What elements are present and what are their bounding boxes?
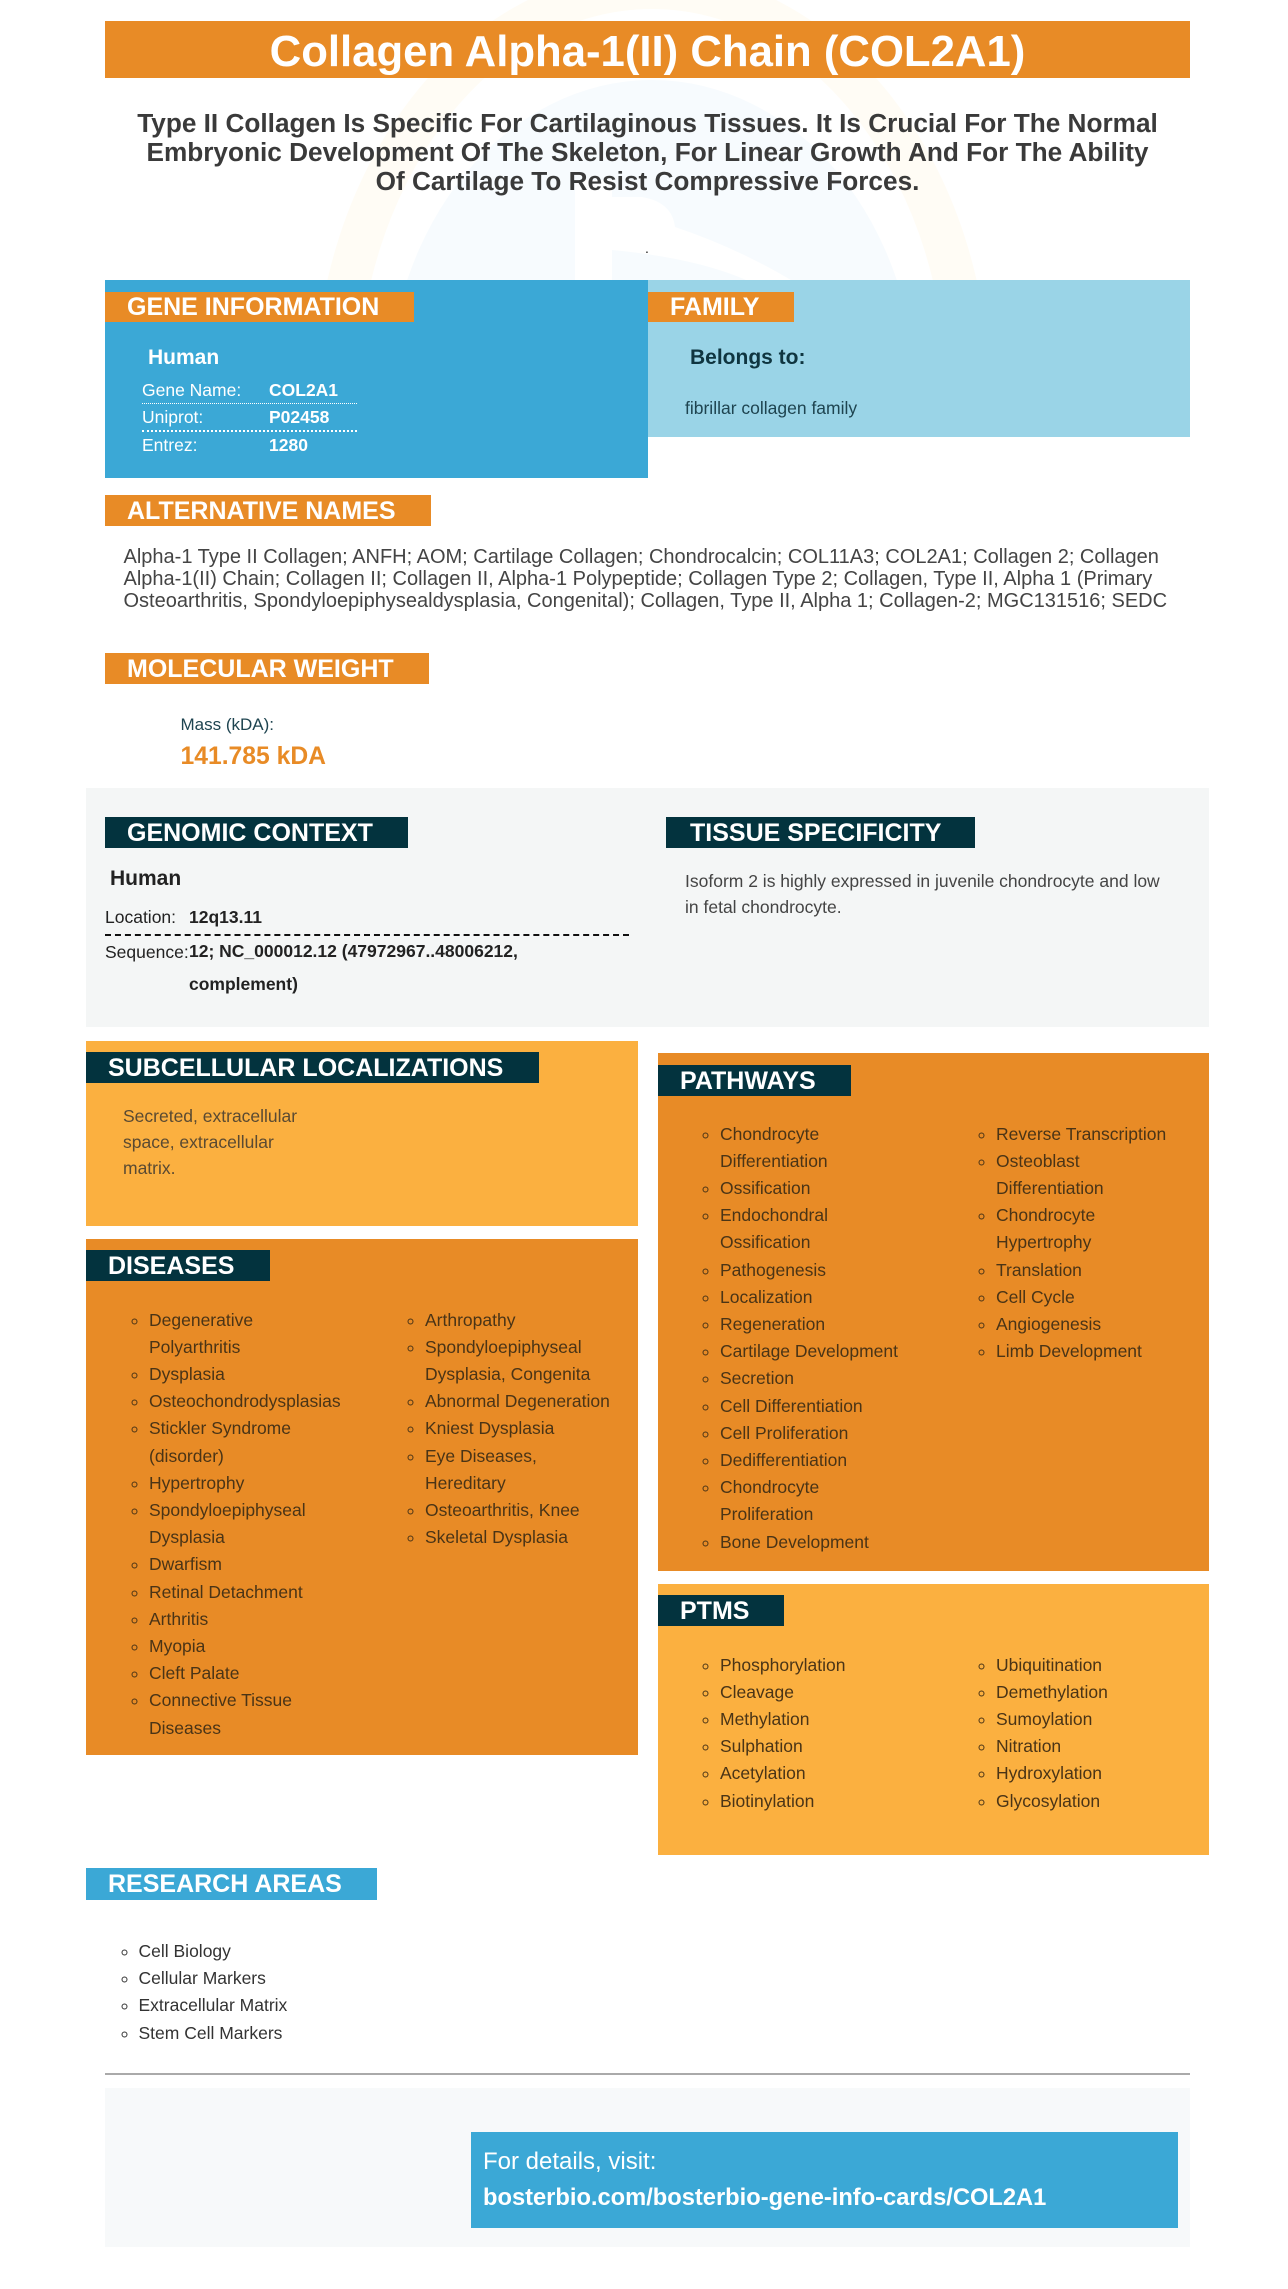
heading: diseases: DISEASES [108,1252,234,1280]
heading: tissue specificity: TISSUE SPECIFICITY [690,819,941,847]
gene name row [142,377,357,404]
research areas list [122,1941,287,2043]
panel: PTMs [658,1584,1209,1855]
summary text [137,108,1158,196]
panel: subcellular localizations [86,1041,638,1226]
localization text: space, extracellular [123,1132,274,1152]
disease list column 1: (disorder) [149,1446,224,1466]
title: Collagen Alpha-1(II) Chain (COL2A1) [270,27,1025,76]
panel: genomic context and tissue specificity: complement) [189,974,298,994]
disease list column 1: Osteochondrodysplasias [149,1391,341,1411]
pathway list column 1: Chondrocyte [720,1477,819,1497]
pathway list column 1: Proliferation [720,1504,813,1524]
summary text: Embryonic Development Of The Skeleton, For Linear Growth And For The Ability [146,136,1149,166]
PTM list column 2: Ubiquitination [996,1654,1102,1674]
pathway list column 2: Differentiation [996,1178,1104,1198]
pathway list column 1: Dedifferentiation [720,1450,847,1470]
alternative names text: Osteoarthritis, Spondyloepiphysealdysplasia, Congenital); Collagen, Type II, Alpha 1; Collagen-2; MGC131516; SEDC [124,590,1167,612]
disease list column 2: Spondyloepiphyseal [425,1337,582,1357]
pathway list column 2: Reverse Transcription [996,1124,1166,1144]
pathway list column 2: Chondrocyte [996,1205,1095,1225]
disease list column 2 [408,1310,610,1547]
PTM list column 1: Acetylation [720,1763,806,1783]
disease list column 1: Diseases [149,1718,221,1738]
pathway list column 1: Bone Development [720,1532,869,1552]
disease list column 1: Myopia [149,1636,205,1656]
location row: Location: [105,907,176,927]
pathway list column 1: Ossification [720,1232,810,1252]
disease list column 1 [132,1310,341,1738]
disease list column 2: Eye Diseases, [425,1446,537,1466]
PTM list column 1: Cleavage [720,1682,794,1702]
tissue specificity text [685,871,1160,917]
disease list column 2: Dysplasia, Congenita [425,1364,590,1384]
heading: PTMs: PTMS [680,1597,749,1625]
disease list column 2: Osteoarthritis, Knee [425,1500,580,1520]
panel: footer [105,2088,1190,2247]
alternative names text: Alpha-1 Type II Collagen; ANFH; AOM; Cartilage Collagen; Chondrocalcin; COL11A3; COL2A1; Collagen 2; Collagen [124,546,1159,568]
disease list column 1: Dwarfism [149,1554,222,1574]
heading: pathways: PATHWAYS [680,1067,816,1095]
disease list column 1: Arthritis [149,1609,208,1629]
dashed divider [105,934,629,936]
heading: molecular weight: MOLECULAR WEIGHT [127,655,394,683]
disease list column 2: Arthropathy [425,1310,515,1330]
pathway list column 1: Differentiation [720,1151,828,1171]
alternative names text: Alpha-1(II) Chain; Collagen II; Collagen II, Alpha-1 Polypeptide; Collagen Type 2; Collagen, Type II, Alpha 1 (Primary [124,568,1152,590]
tissue specificity text: in fetal chondrocyte. [685,897,842,917]
disease list column 1: Spondyloepiphyseal [149,1500,306,1520]
footer divider [105,2073,1190,2075]
disease list column 1: Connective Tissue [149,1690,292,1710]
disease list column 1: Hypertrophy [149,1473,244,1493]
heading: research areas: RESEARCH AREAS [108,1870,342,1898]
pathway list column 1: Endochondral [720,1205,828,1225]
panel: genomic context and tissue specificity: 12q13.11 [189,907,262,927]
entrez row: Entrez: [142,435,197,455]
heading: pathways [658,1065,851,1096]
PTM list column 2: Glycosylation [996,1791,1100,1811]
details label: For details, visit: [483,2148,656,2175]
heading: PTMs [658,1595,784,1626]
mass value: 141.785 kDA [180,743,326,770]
research areas list: Extracellular Matrix [138,1995,287,2015]
heading: family: FAMILY [670,293,759,321]
details URL: bosterbio.com/bosterbio-gene-info-cards/COL2A1 [483,2185,1046,2211]
PTM list column 1: Biotinylation [720,1791,814,1811]
small dot: . [645,240,649,256]
research areas list: Cellular Markers [138,1968,266,1988]
pathway list column 1: Regeneration [720,1314,825,1334]
species label: Human [148,346,219,369]
pathway list column 2: Translation [996,1260,1082,1280]
summary text: Type II Collagen Is Specific For Cartilaginous Tissues. It Is Crucial For The Normal [137,108,1158,138]
pathway list column 1: Cell Differentiation [720,1396,863,1416]
PTM list column 2: Sumoylation [996,1709,1092,1729]
gene name row: Gene Name: [142,380,241,400]
sequence row: Sequence: [105,942,189,962]
family text: fibrillar collagen family [685,398,857,418]
pathway list column 2: Limb Development [996,1341,1142,1361]
heading: diseases [86,1250,270,1281]
disease list column 2: Hereditary [425,1473,506,1493]
pathway list column 1: Pathogenesis [720,1260,826,1280]
uniprot row: Uniprot: [142,407,203,427]
uniprot row: P02458 [269,407,329,427]
heading: gene information: GENE INFORMATION [127,293,379,321]
alternative names text [124,546,1167,612]
panel: genomic context and tissue specificity: 12; NC_000012.12 (47972967..48006212, [189,941,518,961]
disease list column 1: Dysplasia [149,1364,225,1384]
background watermark logo [328,0,976,280]
panel: gene information: 1280 [269,435,308,455]
pathway list column 1: Ossification [720,1178,810,1198]
PTM list column 2: Demethylation [996,1682,1108,1702]
summary text: Of Cartilage To Resist Compressive Forces. [376,166,919,196]
disease list column 1: Polyarthritis [149,1337,240,1357]
disease list column 2: Abnormal Degeneration [425,1391,610,1411]
PTM list column 2: Nitration [996,1736,1061,1756]
pathway list column 2 [978,1124,1166,1361]
disease list column 1: Stickler Syndrome [149,1418,291,1438]
pathway list column 1 [702,1124,898,1552]
localization text: matrix. [123,1158,176,1178]
research areas list: Cell Biology [138,1941,231,1961]
location row [105,907,262,927]
pathway list column 2: Angiogenesis [996,1314,1101,1334]
panel: genomic context and tissue specificity [86,788,1209,1027]
heading: family [648,292,794,322]
panel: family [648,280,1190,437]
panel: pathways [658,1053,1209,1571]
heading: subcellular localizations: SUBCELLULAR LOCALIZATIONS [108,1054,503,1082]
PTM list column 1: Sulphation [720,1736,803,1756]
panel: gene information [105,280,648,478]
pathway list column 1: Cell Proliferation [720,1423,848,1443]
uniprot row [142,404,357,432]
pathway list column 1: Chondrocyte [720,1124,819,1144]
pathway list column 2: Hypertrophy [996,1232,1091,1252]
heading: alternative names: ALTERNATIVE NAMES [127,497,396,525]
callout: details link [471,2132,1178,2228]
pathway list column 1: Localization [720,1287,812,1307]
PTM list column 2: Hydroxylation [996,1763,1102,1783]
localization text [123,1106,297,1178]
pathway list column 1: Cartilage Development [720,1341,898,1361]
PTM list column 1: Phosphorylation [720,1654,846,1674]
gene name row: COL2A1 [269,380,338,400]
localization text: Secreted, extracellular [123,1106,297,1126]
disease list column 2: Kniest Dysplasia [425,1418,554,1438]
disease list column 1: Cleft Palate [149,1663,239,1683]
heading: genomic context: GENOMIC CONTEXT [127,819,373,847]
PTM list column 1 [702,1654,846,1811]
species label: Human [110,867,181,890]
panel: diseases [86,1239,638,1755]
research areas list: Stem Cell Markers [138,2023,282,2043]
title [105,21,1190,78]
disease list column 1: Retinal Detachment [149,1582,303,1602]
entrez row [142,435,308,455]
mass label: Mass (kDA): [180,715,274,734]
PTM list column 1: Methylation [720,1709,810,1729]
pathway list column 2: Cell Cycle [996,1287,1075,1307]
belongs to label: Belongs to: [690,346,806,369]
sequence row [105,941,518,994]
pathway list column 1: Secretion [720,1368,794,1388]
PTM list column 2 [978,1654,1108,1811]
disease list column 2: Skeletal Dysplasia [425,1527,568,1547]
pathway list column 2: Osteoblast [996,1151,1080,1171]
disease list column 1: Dysplasia [149,1527,225,1547]
tissue specificity text: Isoform 2 is highly expressed in juvenile chondrocyte and low [685,871,1160,891]
disease list column 1: Degenerative [149,1310,253,1330]
